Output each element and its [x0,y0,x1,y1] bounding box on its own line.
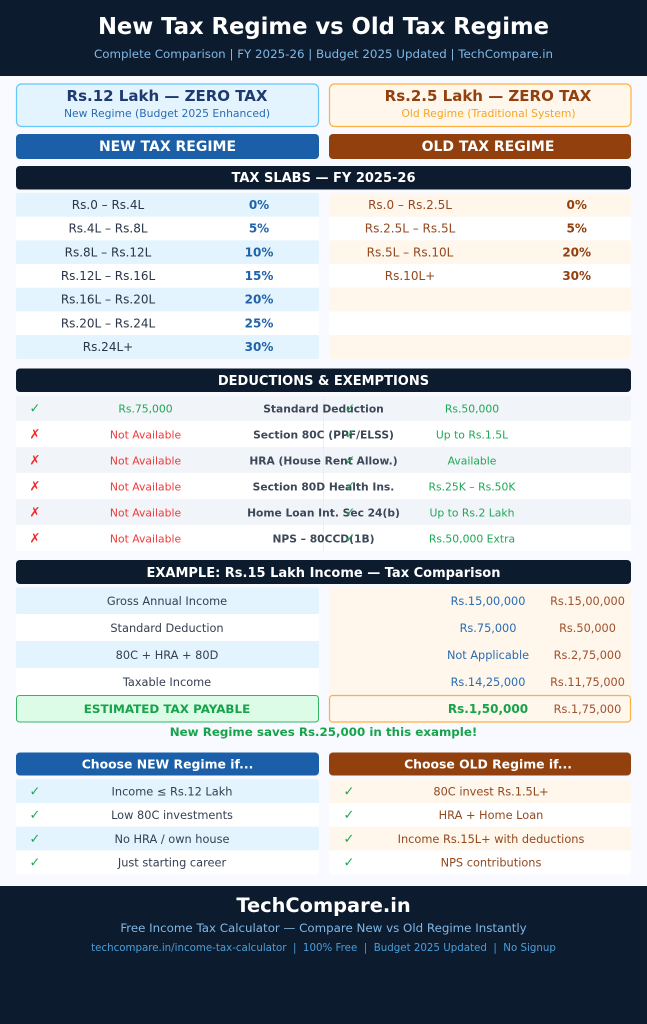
panel: deductions table: Rs.50,000 Extra [429,532,515,546]
panel: deductions table: ✓ [30,402,40,416]
deductions heading: DEDUCTIONS & EXEMPTIONS [218,374,429,389]
callout: old regime zero tax: Rs.2.5 Lakh — ZERO TAX [385,87,592,105]
panel: deductions table: ✓ [345,428,355,442]
footer [0,886,647,1024]
tax slabs heading: TAX SLABS — FY 2025-26 [232,171,416,186]
panel: new regime slabs: 30% [245,340,273,354]
panel: old regime slabs: Rs.10L+ [385,269,435,283]
panel: deductions table: ✓ [345,506,355,520]
panel: example values: Rs.2,75,000 [554,649,621,662]
panel: deductions table: ✓ [345,532,355,546]
panel: new regime slabs: 5% [249,222,269,236]
panel: deductions table: Rs.25K – Rs.50K [428,480,516,494]
footer links: techcompare.in/income-tax-calculator | 100% Free | Budget 2025 Updated | No Signup [91,942,556,954]
panel: deductions table [16,396,631,551]
panel: deductions table: Home Loan Int. Sec 24(b) [247,506,400,520]
savings note: New Regime saves Rs.25,000 in this example! [170,725,477,739]
panel: new regime slabs: Rs.20L – Rs.24L [61,316,155,330]
panel: deductions table: Not Available [110,506,181,520]
panel: choose new list [16,779,319,874]
panel: deductions table: NPS – 80CCD(1B) [272,532,375,546]
panel: new regime slabs: Rs.8L – Rs.12L [65,245,152,259]
panel: choose old list [329,779,631,874]
panel: choose old list: ✓ [344,832,354,847]
panel: example values: Rs.15,00,000 [451,595,525,608]
panel: deductions table: Not Available [110,532,181,546]
panel: example labels: Taxable Income [122,675,211,689]
panel: example labels: 80C + HRA + 80D [116,648,219,662]
panel: deductions table: Up to Rs.1.5L [436,428,508,442]
panel: choose new list: ✓ [30,784,40,800]
choose old heading [329,752,631,776]
deductions heading [16,368,631,392]
panel: choose old list: NPS contributions [441,856,541,870]
panel: choose old list: ✓ [344,856,354,871]
panel: new regime slabs: 25% [245,316,273,330]
panel: new regime slabs: 10% [245,245,273,259]
panel: new regime slabs: 15% [245,269,273,283]
estimated tax values: Rs.1,50,000 [448,702,528,716]
callout: old regime zero tax [330,84,631,126]
panel: choose old list: ✓ [344,808,354,823]
estimated tax payable label: ESTIMATED TAX PAYABLE [84,702,250,716]
callout: old regime zero tax: Old Regime (Traditional System) [401,107,576,120]
example heading [16,560,631,584]
panel: deductions table: Rs.75,000 [118,402,173,416]
panel: old regime slabs: 30% [562,269,591,283]
panel: deductions table: ✗ [30,480,40,494]
panel: choose old list: ✓ [344,784,354,800]
panel: deductions table: Rs.50,000 [445,402,499,416]
panel: deductions table: HRA (House Rent Allow.) [249,454,398,468]
footer brand: TechCompare.in [236,894,411,917]
panel: deductions table: Standard Deduction [263,402,384,416]
panel: old regime slabs [329,193,631,359]
panel: example values: Rs.15,00,000 [550,595,625,608]
panel: choose new list: Low 80C investments [111,808,233,822]
callout: new regime zero tax [16,84,318,126]
panel: new regime slabs: 0% [249,198,269,212]
panel: deductions table: Not Available [110,480,181,494]
callout: new regime zero tax: Rs.12 Lakh — ZERO TAX [67,87,268,105]
new regime heading: NEW TAX REGIME [99,139,236,155]
panel: choose new list: ✓ [30,856,40,871]
panel: example labels [16,588,319,695]
panel: new regime slabs [16,193,319,359]
panel: choose old list: 80C invest Rs.1.5L+ [433,784,549,798]
panel: deductions table: ✓ [345,402,355,416]
tax slabs heading [16,166,631,190]
panel: example values [329,588,631,695]
title: New Tax Regime vs Old Tax Regime [98,14,549,40]
old regime heading [329,134,631,159]
panel: old regime slabs: 0% [567,198,587,212]
panel: example values: Not Applicable [447,649,529,662]
panel: choose new list: Just starting career [117,856,226,870]
panel: example values: Rs.14,25,000 [451,676,525,689]
subtitle: Complete Comparison | FY 2025-26 | Budget 2025 Updated | TechCompare.in [94,47,553,62]
panel: new regime slabs: Rs.0 – Rs.4L [72,198,145,212]
panel: new regime slabs: 20% [245,293,273,307]
panel: old regime slabs: Rs.2.5L – Rs.5L [365,222,456,236]
panel: choose new list: No HRA / own house [114,832,230,846]
panel: deductions table: Available [448,454,497,468]
panel: example labels: Gross Annual Income [107,594,227,608]
choose new heading [16,752,319,776]
panel: example labels: Standard Deduction [110,621,224,635]
panel: old regime slabs: 20% [562,245,591,259]
panel: old regime slabs: Rs.0 – Rs.2.5L [368,198,452,212]
example heading: EXAMPLE: Rs.15 Lakh Income — Tax Comparison [146,566,501,581]
panel: new regime slabs: Rs.4L – Rs.8L [68,222,148,236]
panel: choose new list: ✓ [30,808,40,823]
estimated tax payable label [16,696,318,722]
panel: choose old list: Income Rs.15L+ with deductions [398,832,584,846]
panel: deductions table: ✗ [30,506,40,520]
panel: old regime slabs: 5% [567,222,587,236]
header banner [0,0,647,76]
panel: deductions table: Not Available [110,454,181,468]
panel: deductions table: ✗ [30,428,40,442]
choose new heading: Choose NEW Regime if... [82,756,253,772]
panel: example values: Rs.75,000 [460,622,516,635]
panel: example values: Rs.50,000 [559,622,616,635]
estimated tax values: Rs.1,75,000 [554,703,621,716]
callout: new regime zero tax: New Regime (Budget 2025 Enhanced) [64,107,270,120]
panel: deductions table: ✓ [345,454,355,468]
panel: deductions table: ✗ [30,454,40,468]
panel: choose old list: HRA + Home Loan [439,808,543,822]
panel: deductions table: Section 80C (PPF/ELSS) [253,428,394,442]
estimated tax values [330,696,630,722]
panel: deductions table: ✗ [30,532,40,546]
panel: new regime slabs: Rs.12L – Rs.16L [61,269,155,283]
panel: choose new list: Income ≤ Rs.12 Lakh [112,784,232,798]
panel: example values: Rs.11,75,000 [550,676,625,689]
panel: new regime slabs: Rs.16L – Rs.20L [61,293,155,307]
choose old heading: Choose OLD Regime if... [404,756,572,772]
new regime heading [16,134,319,159]
panel: old regime slabs: Rs.5L – Rs.10L [367,245,454,259]
panel: deductions table: Not Available [110,428,181,442]
old regime heading: OLD TAX REGIME [422,139,554,155]
panel: new regime slabs: Rs.24L+ [83,340,133,354]
panel: deductions table: Up to Rs.2 Lakh [429,506,515,520]
panel: deductions table: Section 80D Health Ins. [253,480,394,494]
panel: deductions table: ✓ [345,480,355,494]
panel: choose new list: ✓ [30,832,40,847]
footer tagline: Free Income Tax Calculator — Compare New vs Old Regime Instantly [120,921,527,935]
